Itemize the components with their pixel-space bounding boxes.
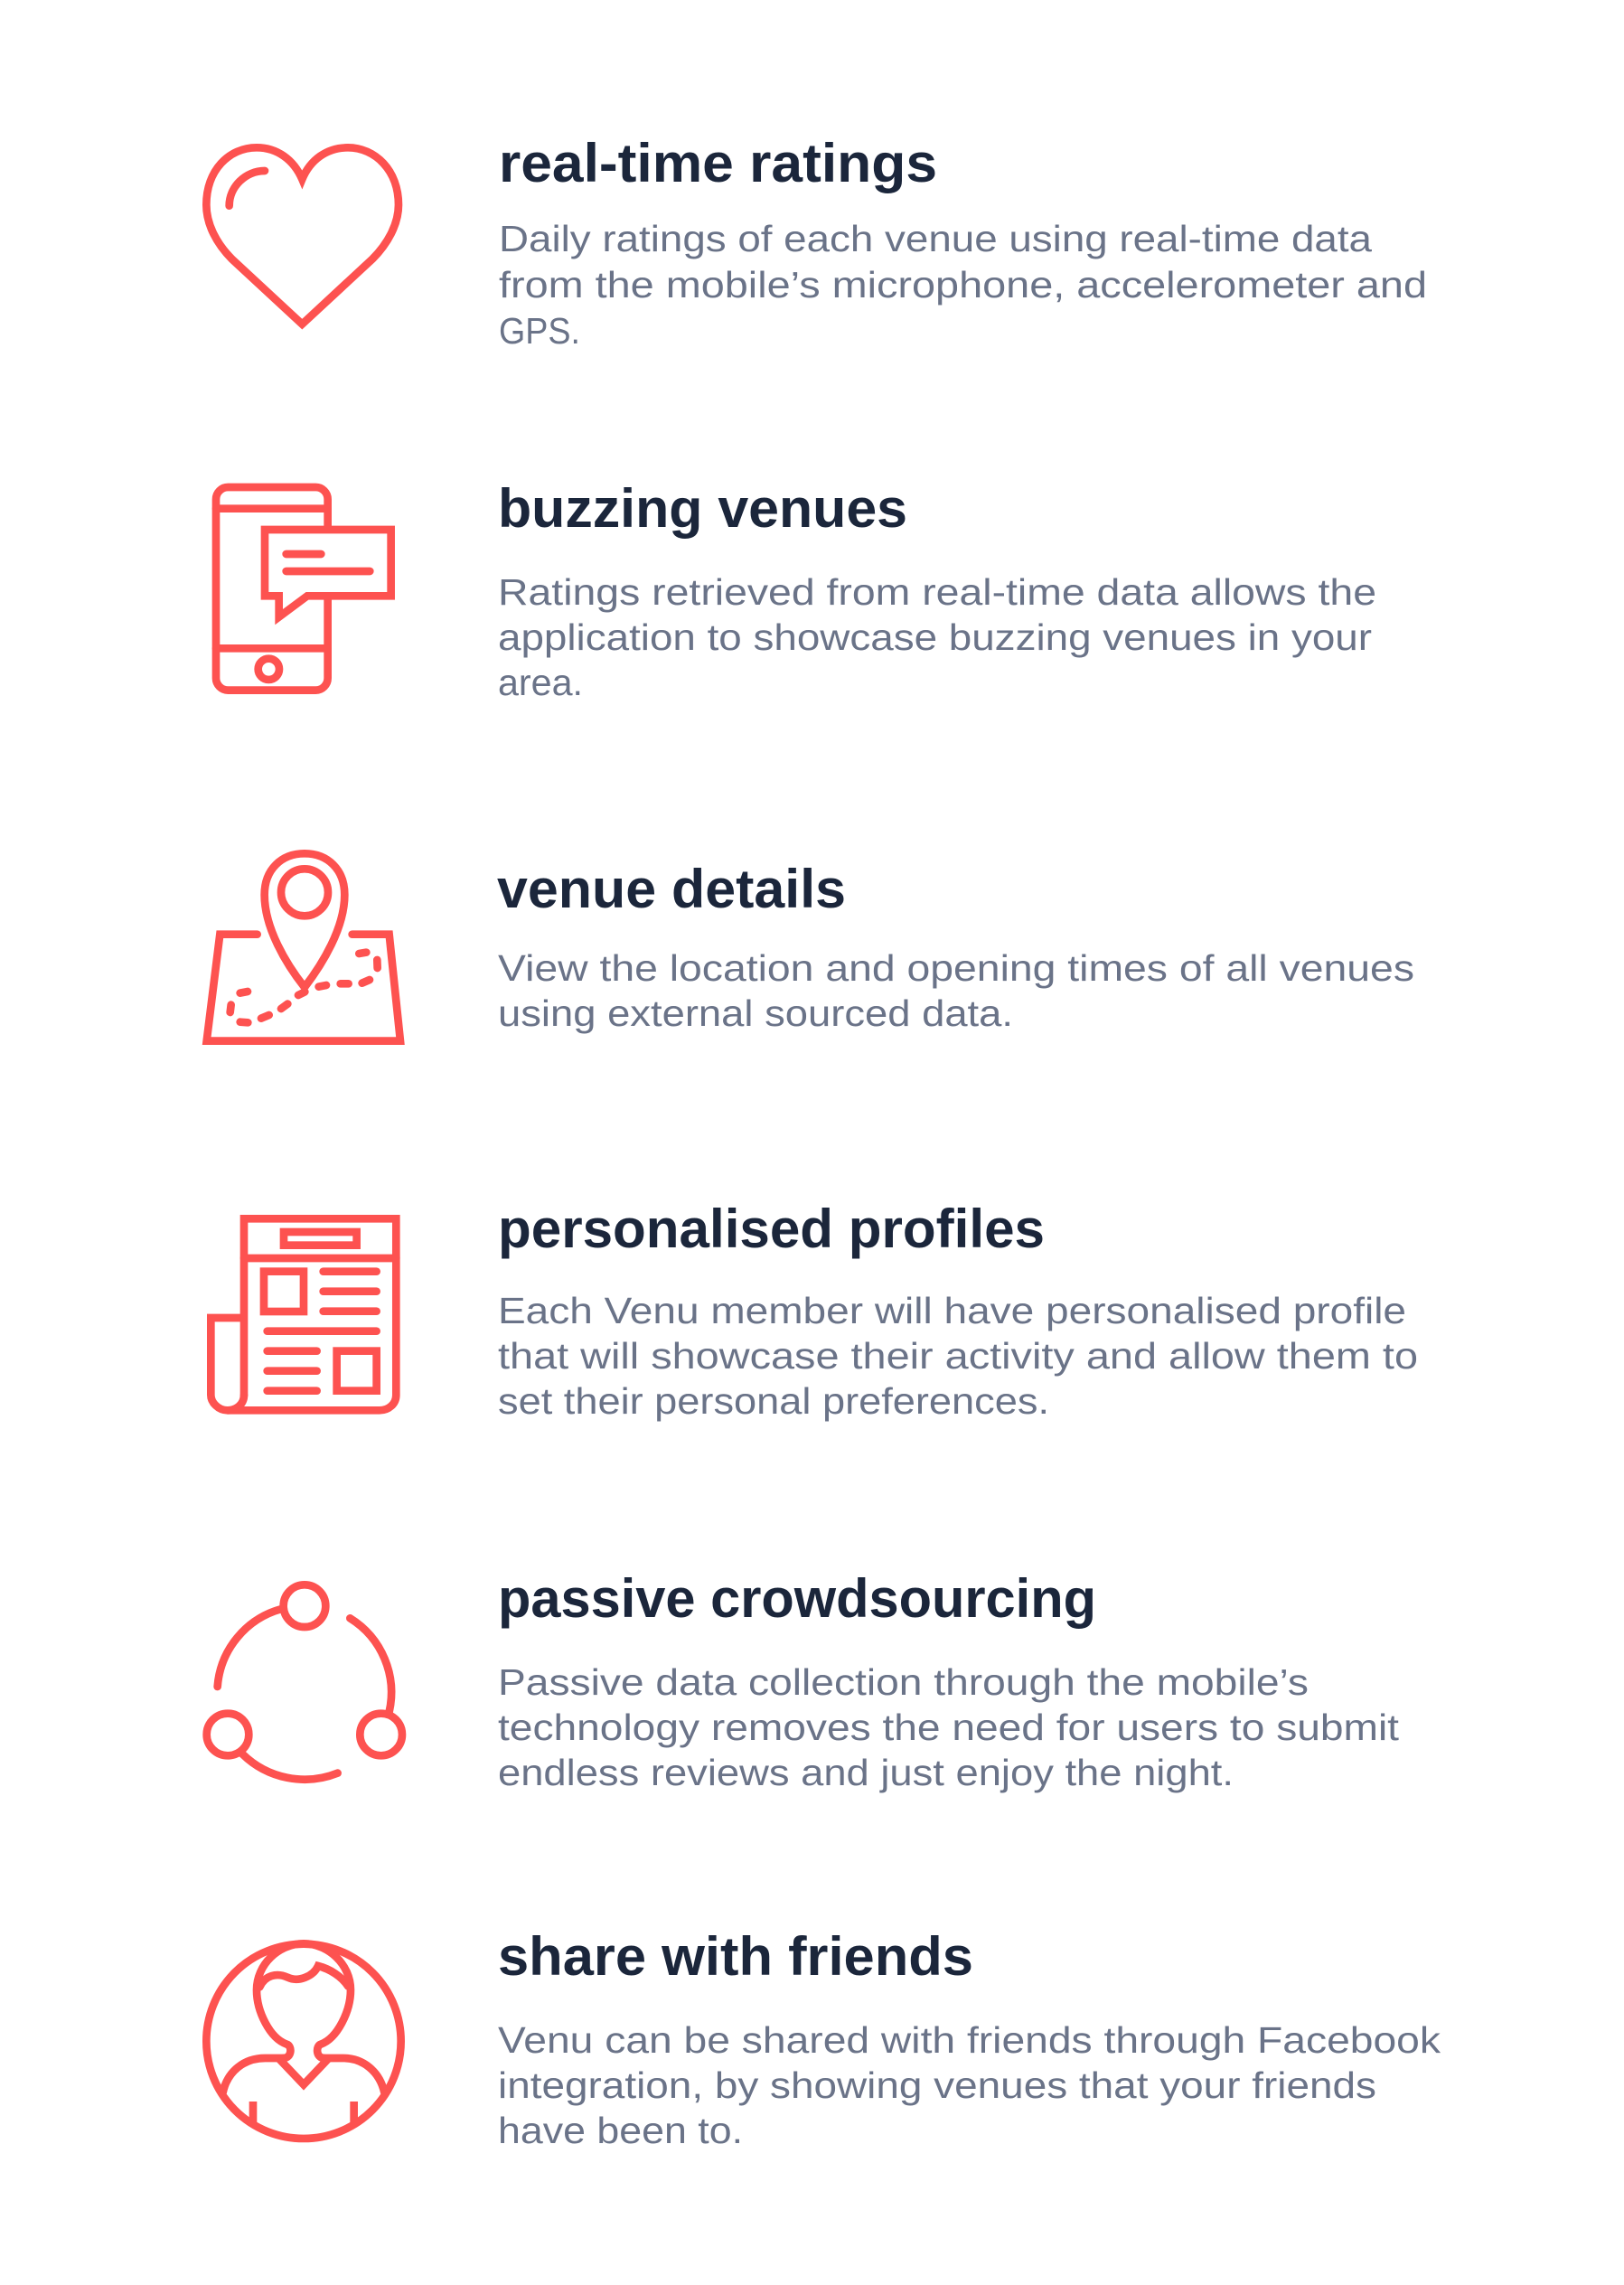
icon: person in circle (206, 1943, 401, 2139)
panel: buzzing venues (216, 478, 1376, 703)
text block: personalised profiles description: that will showcase their activity and allow them to (498, 1335, 1418, 1377)
text block: venue details description: View the location and opening times of all venues (498, 947, 1414, 989)
text block: passive crowdsourcing description: technology removes the need for users to submit (498, 1707, 1400, 1748)
heading: share with friends: share with friends (498, 1926, 973, 1987)
text block: buzzing venues description: area. (498, 662, 583, 703)
icon: heart (206, 147, 399, 324)
heading: buzzing venues: buzzing venues (498, 478, 907, 539)
text block: share with friends description (498, 2019, 1441, 2151)
panel: real-time ratings (206, 133, 1427, 352)
panel: passive crowdsourcing (207, 1568, 1400, 1793)
text block: share with friends description: have been to. (498, 2110, 743, 2151)
text block: personalised profiles description: set their personal preferences. (498, 1380, 1049, 1422)
text block: venue details description: using external sourced data. (498, 992, 1013, 1034)
panel: share with friends (206, 1926, 1441, 2151)
text block: venue details description (498, 947, 1414, 1034)
icon: map with pin (207, 853, 400, 1041)
text block: personalised profiles description: Each Venu member will have personalised profile (498, 1290, 1406, 1331)
heading: real-time ratings: real-time ratings (499, 133, 937, 193)
text block: buzzing venues description (498, 571, 1376, 703)
panel: personalised profiles (211, 1199, 1418, 1422)
icon: newspaper (211, 1218, 396, 1410)
text block: real-time ratings description: Daily ratings of each venue using real-time data (499, 218, 1372, 259)
text block: passive crowdsourcing description: Passive data collection through the mobile’s (498, 1661, 1309, 1703)
text block: real-time ratings description (499, 218, 1427, 352)
text block: share with friends description: Venu can be shared with friends through Facebook (498, 2019, 1441, 2061)
heading: venue details: venue details (497, 859, 846, 919)
heading: passive crowdsourcing: passive crowdsourcing (498, 1568, 1096, 1629)
text block: passive crowdsourcing description: endless reviews and just enjoy the night. (498, 1752, 1234, 1793)
icon: three connected circles (207, 1584, 402, 1780)
text block: real-time ratings description: from the mobile’s microphone, accelerometer and (499, 264, 1427, 306)
icon: phone with speech bubble (216, 487, 391, 691)
text block: buzzing venues description: Ratings retrieved from real-time data allows the (498, 571, 1376, 613)
text block: passive crowdsourcing description (498, 1661, 1400, 1793)
text block: buzzing venues description: application to showcase buzzing venues in your (498, 616, 1372, 658)
text block: personalised profiles description (498, 1290, 1418, 1422)
text block: share with friends description: integration, by showing venues that your friends (498, 2064, 1376, 2106)
panel: venue details (207, 853, 1414, 1041)
heading: personalised profiles: personalised profiles (498, 1199, 1045, 1259)
text block: real-time ratings description: GPS. (499, 310, 580, 352)
